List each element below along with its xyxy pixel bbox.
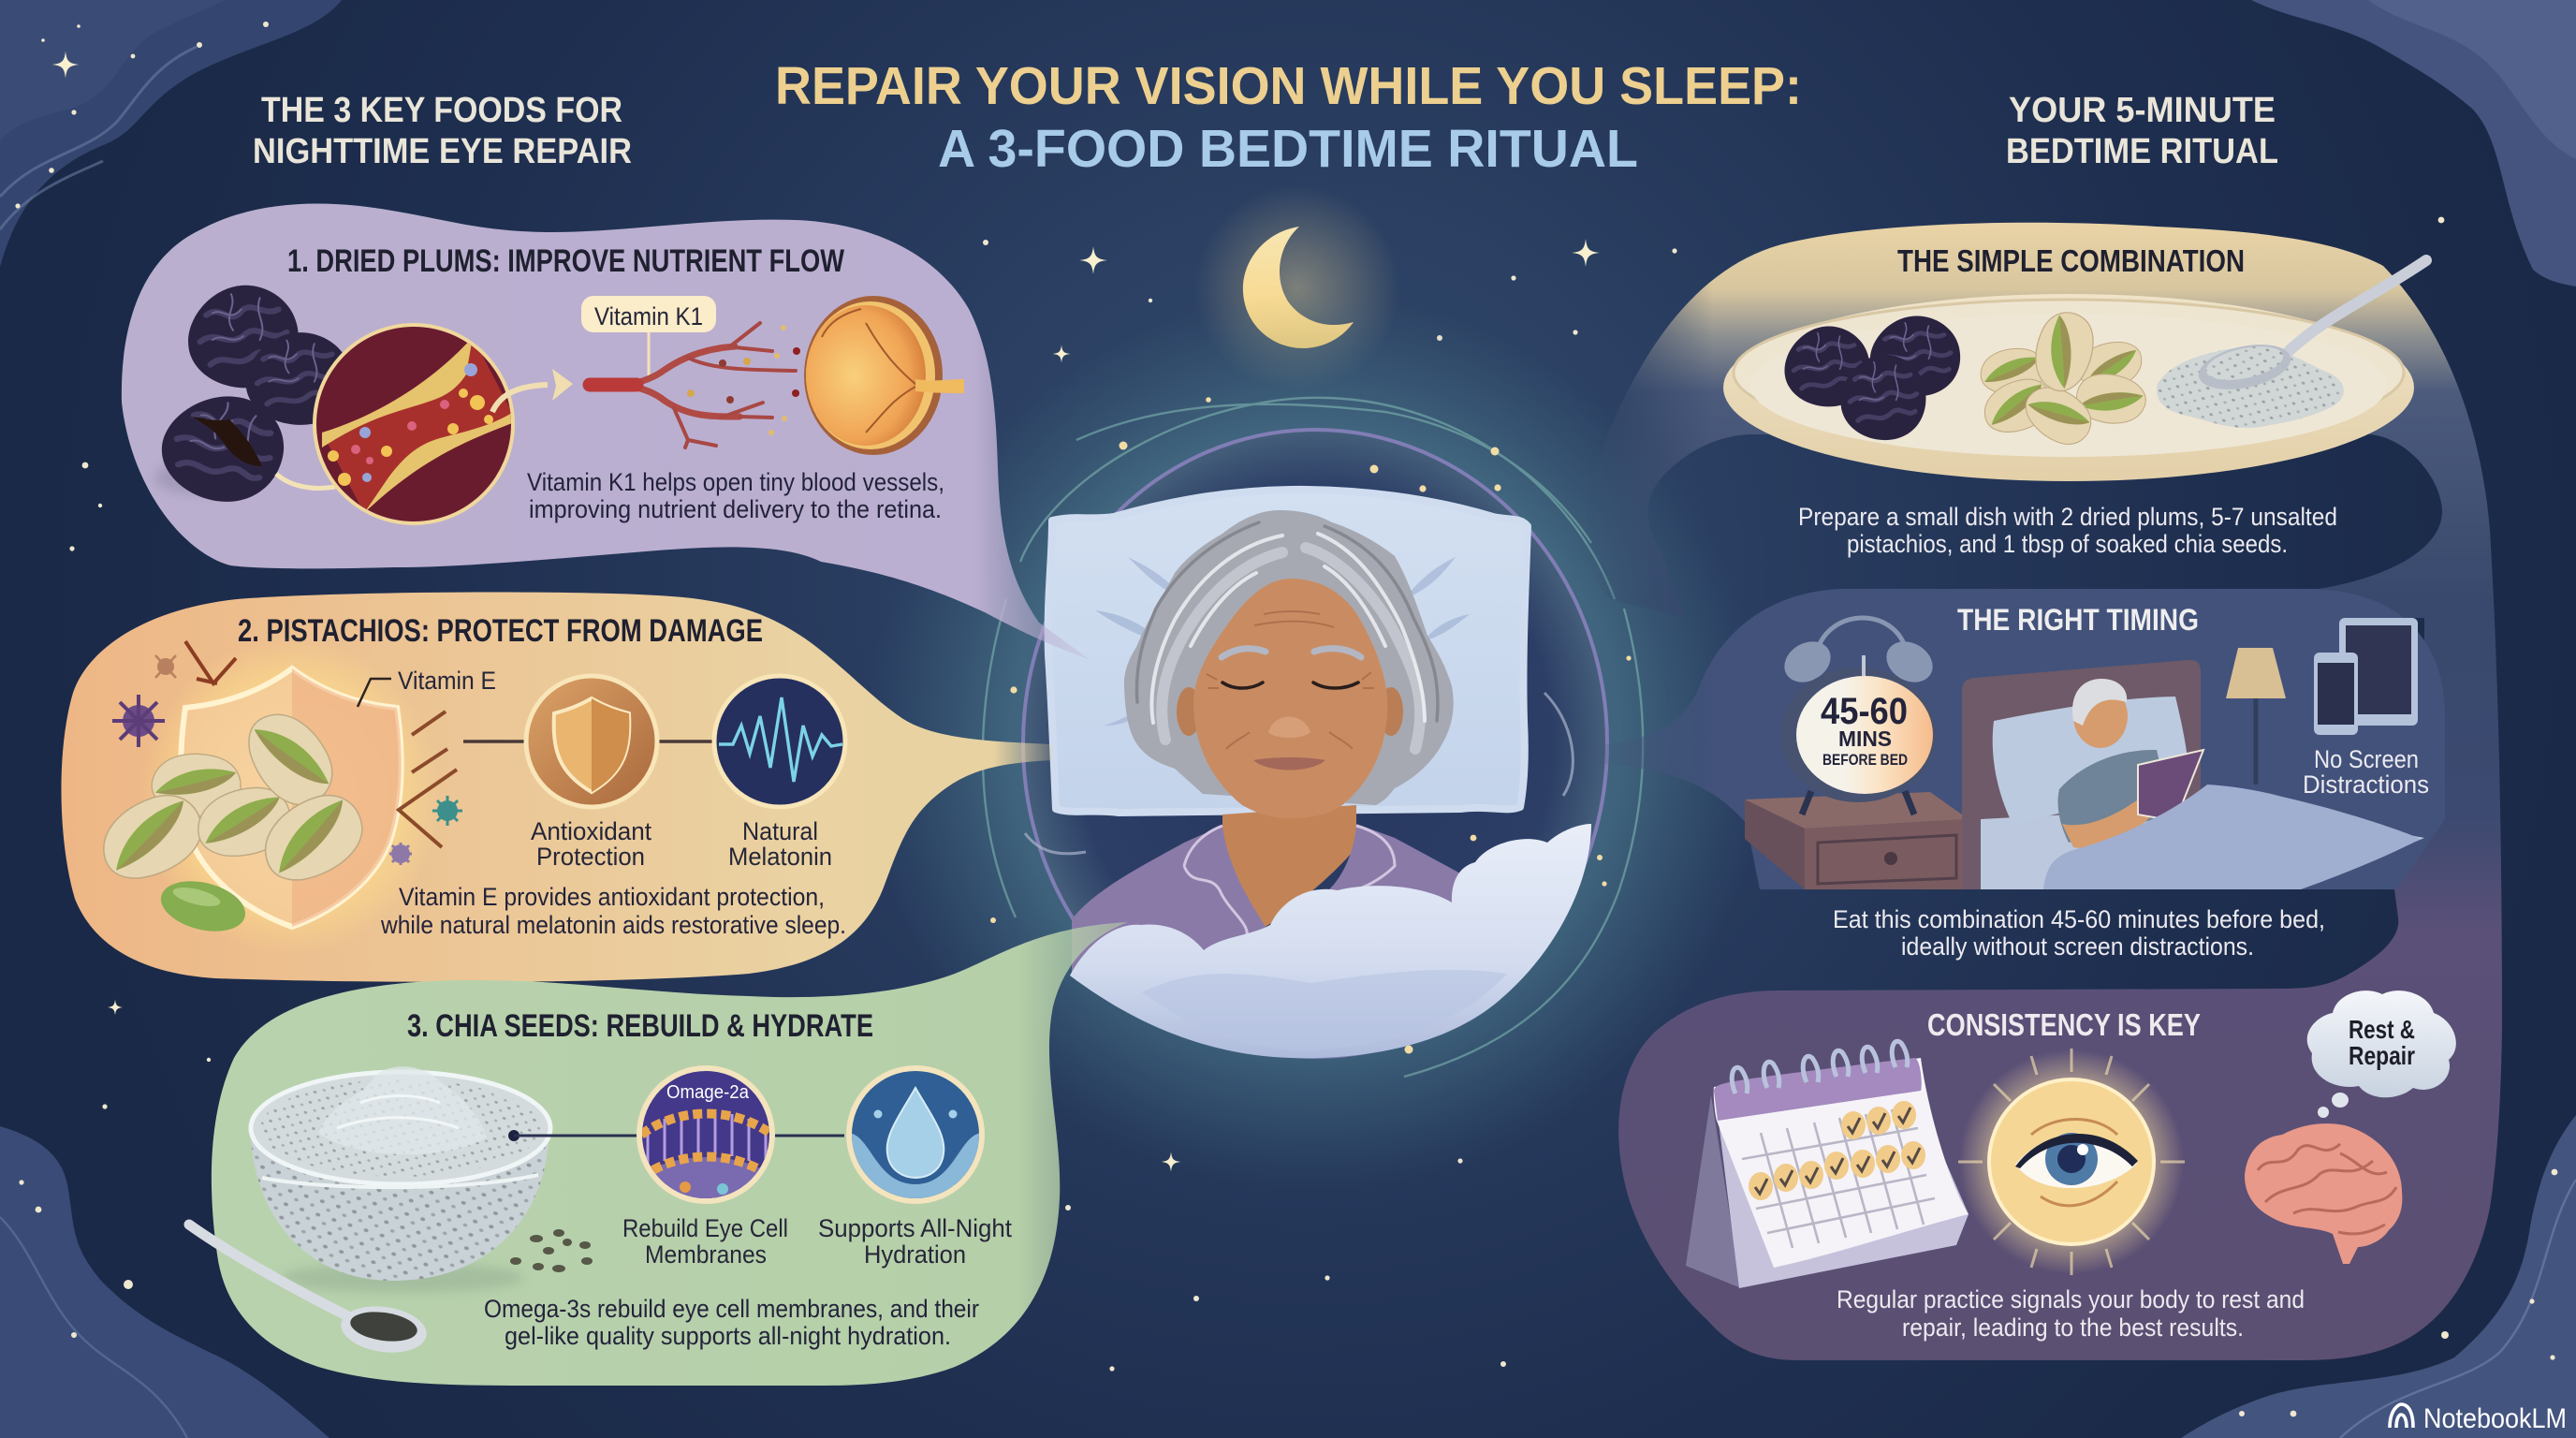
pajama collar bbox=[1184, 826, 1395, 941]
icon: calendar bbox=[1686, 1041, 1969, 1288]
title: REPAIR YOUR VISION WHILE YOU SLEEP: bbox=[775, 56, 1802, 116]
crescent moon bbox=[1194, 185, 1400, 391]
icon: melatonin wave bbox=[714, 676, 845, 807]
labels: Protection bbox=[536, 843, 645, 871]
heading: right column: BEDTIME RITUAL bbox=[2006, 132, 2278, 171]
body text: ideally without screen distractions. bbox=[1901, 932, 2254, 961]
icon: plums on plate bbox=[1784, 315, 1960, 440]
body text: while natural melatonin aids restorative sleep. bbox=[380, 911, 846, 939]
connector line bbox=[463, 740, 714, 743]
closed eyes bbox=[1222, 682, 1358, 688]
icon: bedside lamp bbox=[2226, 648, 2286, 785]
body text: gel-like quality supports all-night hydration. bbox=[505, 1322, 951, 1350]
heading: left column: THE 3 KEY FOODS FOR bbox=[261, 91, 622, 130]
corner swirl: bottom right bbox=[2181, 1115, 2576, 1438]
heading: right column bbox=[2006, 91, 2278, 171]
vitamin E leader bbox=[358, 679, 391, 707]
body text: Vitamin K1 helps open tiny blood vessels, bbox=[527, 468, 944, 496]
vitamin E label: Vitamin E bbox=[398, 667, 496, 695]
title bbox=[775, 56, 1802, 179]
icon: branching vessels bbox=[588, 323, 796, 448]
body text bbox=[1798, 503, 2337, 558]
labels: Melatonin bbox=[728, 843, 832, 871]
heading: THE RIGHT TIMING bbox=[1957, 603, 2199, 637]
icon: tablet and phone bbox=[2314, 618, 2418, 735]
labels: Supports All-Night bbox=[818, 1214, 1012, 1242]
heading: right column: YOUR 5-MINUTE bbox=[2009, 91, 2276, 130]
icon: water drop bbox=[846, 1065, 985, 1208]
body text: repair, leading to the best results. bbox=[1902, 1313, 2244, 1342]
panel: consistency is key bbox=[1686, 990, 2456, 1342]
connector from plum to vessel bbox=[276, 474, 335, 488]
icon: omega membrane: Omage-2a bbox=[666, 1082, 750, 1103]
clock labels bbox=[1821, 691, 1908, 769]
icon: spoon bbox=[2195, 260, 2426, 397]
corner swirl: bottom left bbox=[0, 1126, 329, 1438]
orb sparkles bbox=[990, 397, 1632, 1054]
central orb: sleeping woman bbox=[866, 294, 1764, 1193]
vitamin K1 label: Vitamin K1 bbox=[594, 302, 703, 330]
body text bbox=[1837, 1285, 2305, 1342]
panel shape bbox=[122, 203, 1090, 660]
labels: Natural bbox=[742, 817, 818, 845]
orb ring bbox=[1023, 430, 1607, 1057]
body text: Eat this combination 45-60 minutes before bed, bbox=[1833, 905, 2325, 933]
heading: left column: NIGHTTIME EYE REPAIR bbox=[253, 132, 632, 171]
nose bbox=[1268, 717, 1310, 738]
icon: brain bbox=[2245, 1123, 2402, 1264]
icon: pistachios on plate bbox=[1979, 305, 2150, 456]
clock labels: 45-60 bbox=[1821, 691, 1908, 732]
arch behind the simple combination bbox=[1587, 223, 2490, 618]
pillow bbox=[1048, 490, 1528, 813]
blanket cloud bbox=[1070, 824, 1591, 1058]
smile bbox=[1253, 757, 1325, 770]
inner swirl accents bbox=[1025, 693, 1573, 854]
hair strands bbox=[1136, 522, 1438, 749]
label: no screen distractions bbox=[2303, 745, 2429, 799]
arrow to retina bbox=[492, 369, 573, 412]
icon: eye in glowing sun bbox=[1958, 1049, 2185, 1275]
clock labels: BEFORE BED bbox=[1822, 751, 1908, 769]
label: no screen distractions: Distractions bbox=[2303, 770, 2429, 799]
icon: spoon of seeds bbox=[189, 1225, 430, 1357]
ears bbox=[1177, 687, 1403, 736]
orbit wisps bbox=[983, 398, 1643, 1077]
icon: dried plums bbox=[146, 286, 351, 516]
labels bbox=[622, 1214, 1012, 1269]
panel shape bbox=[1582, 589, 2445, 889]
icon: soaked chia bbox=[2157, 346, 2344, 428]
labels: Membranes bbox=[645, 1240, 767, 1269]
icon: thought cloud: Rest & bbox=[2349, 1015, 2415, 1044]
body text: Vitamin E provides antioxidant protection, bbox=[399, 883, 825, 911]
wrinkles bbox=[1207, 611, 1374, 749]
body text: Omega-3s rebuild eye cell membranes, and their bbox=[484, 1295, 979, 1323]
icon: blood vessel cross-section bbox=[313, 323, 515, 525]
body text bbox=[484, 1295, 979, 1350]
icon: nightstand bbox=[1745, 792, 1969, 889]
icon: omega membrane bbox=[637, 1065, 777, 1208]
panel shape bbox=[212, 922, 1128, 1386]
connector line bbox=[508, 1130, 844, 1141]
right column backing shape bbox=[1587, 223, 2502, 1360]
panel: the simple combination bbox=[1723, 243, 2426, 558]
icon: alarm clock bbox=[1777, 618, 1940, 814]
face bbox=[1193, 579, 1387, 818]
body text bbox=[380, 883, 846, 939]
panel: the right timing bbox=[1582, 589, 2445, 961]
heading: left column bbox=[253, 91, 632, 171]
icon: shield with pistachios bbox=[91, 637, 440, 955]
panel: dried plums bbox=[122, 203, 1090, 660]
heading: 2. PISTACHIOS: PROTECT FROM DAMAGE bbox=[238, 613, 763, 649]
labels: Hydration bbox=[864, 1240, 966, 1269]
pajama top bbox=[1072, 824, 1498, 974]
body text bbox=[527, 468, 944, 523]
hair bbox=[1124, 510, 1454, 805]
labels: Antioxidant bbox=[531, 817, 651, 845]
heading: CONSISTENCY IS KEY bbox=[1927, 1007, 2201, 1042]
body text bbox=[1833, 905, 2325, 961]
corner swirl: top left bbox=[0, 0, 342, 267]
heading: THE SIMPLE COMBINATION bbox=[1897, 243, 2245, 278]
body text: Prepare a small dish with 2 dried plums, 5-7 unsalted bbox=[1798, 503, 2337, 531]
corner swirl: top right bbox=[2251, 0, 2576, 286]
icon: eye retina bbox=[804, 296, 964, 455]
icon: thought cloud bbox=[2307, 990, 2456, 1118]
body text: pistachios, and 1 tbsp of soaked chia seeds. bbox=[1847, 530, 2288, 558]
body text: improving nutrient delivery to the retina. bbox=[529, 495, 942, 523]
panel shape bbox=[61, 593, 1053, 982]
pillow creases bbox=[1095, 557, 1470, 726]
right band and consistency panel bbox=[1618, 530, 2502, 1360]
icon: antioxidant shield bbox=[526, 676, 657, 807]
clock labels: MINS bbox=[1838, 726, 1892, 751]
icon: bowl of chia pudding bbox=[251, 1066, 550, 1293]
icon: plate bbox=[1723, 294, 2414, 481]
label: no screen distractions: No Screen bbox=[2314, 745, 2419, 773]
eyebrows bbox=[1222, 649, 1361, 657]
orb glow bbox=[866, 294, 1764, 1193]
icons: free radicals bbox=[112, 641, 462, 865]
labels bbox=[531, 817, 832, 871]
labels: Rebuild Eye Cell bbox=[622, 1214, 788, 1242]
particles bbox=[687, 325, 818, 435]
icon: thought cloud: Repair bbox=[2349, 1041, 2415, 1070]
neck bbox=[1222, 805, 1356, 927]
scattered seeds bbox=[510, 1229, 593, 1272]
body text: Regular practice signals your body to rest and bbox=[1837, 1285, 2305, 1313]
title: A 3-FOOD BEDTIME RITUAL bbox=[938, 119, 1638, 179]
vitamin K1 stem bbox=[648, 332, 650, 378]
heading: 3. CHIA SEEDS: REBUILD & HYDRATE bbox=[407, 1008, 873, 1044]
panel: pistachios bbox=[61, 593, 1053, 982]
icon: person reading in bed bbox=[1962, 660, 2424, 889]
panel: chia seeds bbox=[189, 922, 1128, 1386]
vitamin K1 label bbox=[581, 296, 716, 332]
heading: 1. DRIED PLUMS: IMPROVE NUTRIENT FLOW bbox=[287, 243, 845, 279]
